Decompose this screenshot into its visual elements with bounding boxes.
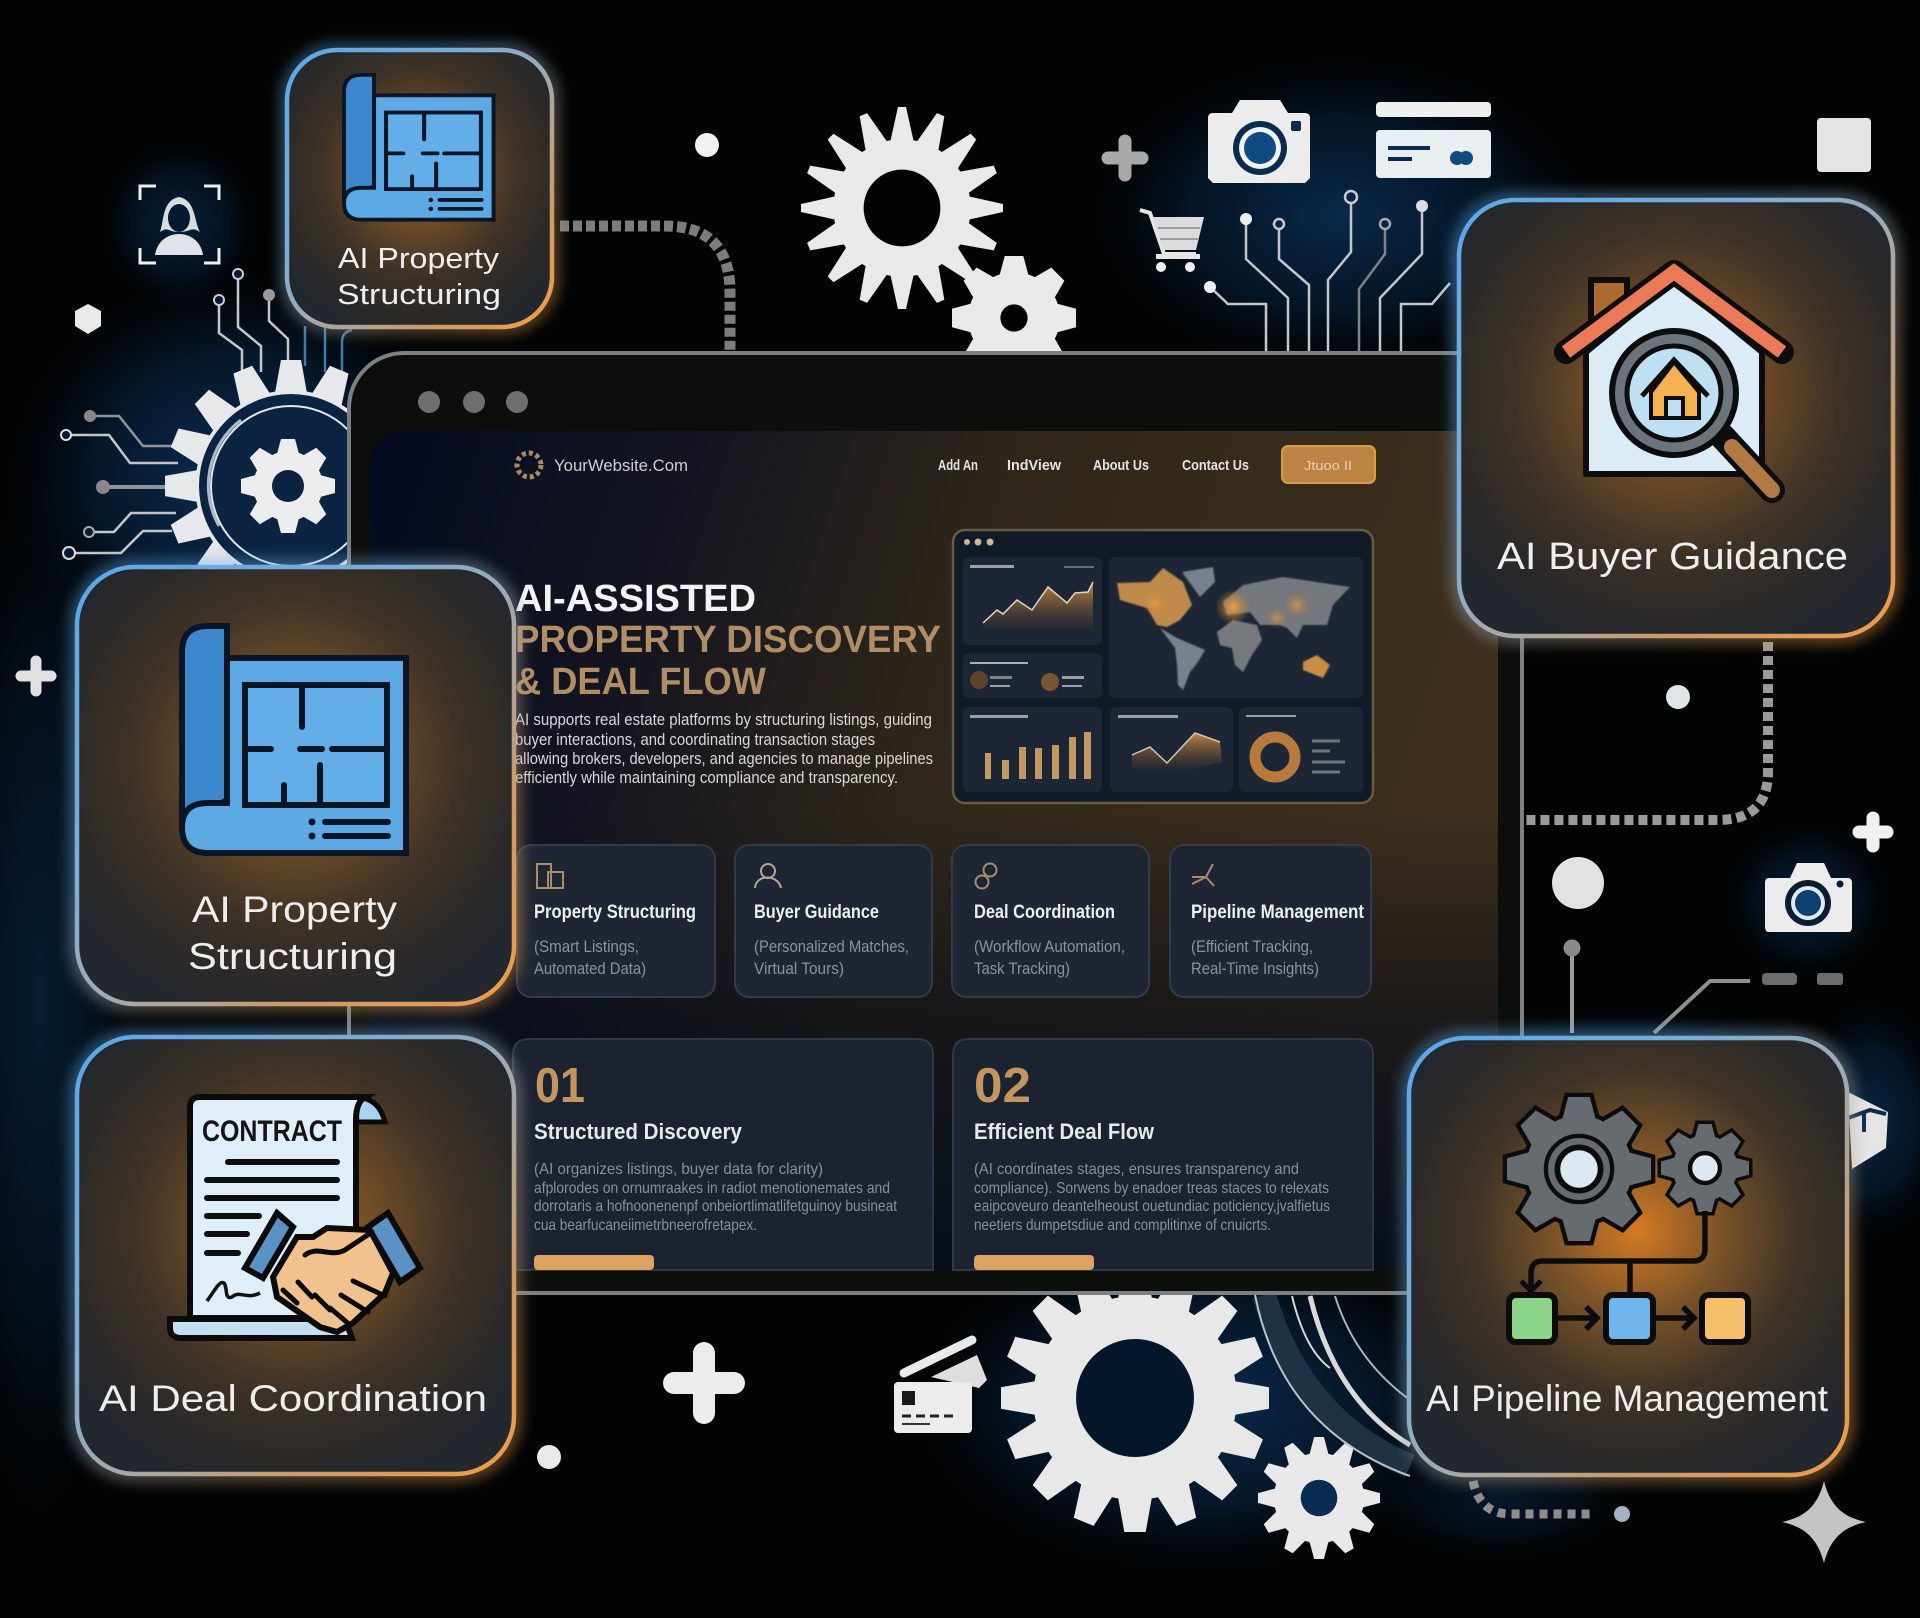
right side decorations xyxy=(1552,685,1887,1033)
benefit card: efficient deal flow: eaipcoveuro deantelheoust ouetundiac poticiency,jvalfietus xyxy=(974,1198,1330,1215)
benefit card: structured discovery: afplorodes on ornumraakes in radiot menotionemates and xyxy=(534,1180,890,1197)
nav: button: Jtuoo II xyxy=(1304,458,1352,473)
icon: big gear bottom xyxy=(945,1208,1325,1588)
page background xyxy=(371,431,1498,1270)
card title: AI Property xyxy=(338,243,500,275)
dashes bottom right xyxy=(1473,1481,1630,1522)
panel: left property card xyxy=(77,567,514,1004)
dashed connector: top card to browser xyxy=(560,226,730,350)
icon: shopping cart xyxy=(1140,210,1204,272)
card title xyxy=(337,243,501,311)
icon: plus left xyxy=(21,661,51,691)
card title: Structuring xyxy=(188,936,397,977)
hero paragraph: buyer interactions, and coordinating transaction stages xyxy=(515,730,875,749)
benefit card: efficient deal flow: (AI coordinates stages, ensures transparency and xyxy=(974,1161,1299,1178)
hero heading: & DEAL FLOW xyxy=(515,661,766,703)
icon: camera right xyxy=(1765,863,1852,932)
dot top xyxy=(695,133,719,157)
icon: four point star xyxy=(1782,1481,1866,1563)
dashboard mockup xyxy=(953,530,1373,803)
benefit card: structured discovery: Structured Discovery xyxy=(534,1119,743,1144)
icon: contract and handshake xyxy=(170,1097,420,1338)
feature card: deal coordination xyxy=(952,845,1149,997)
panel: pipeline management card xyxy=(1409,1038,1847,1475)
benefit card: efficient deal flow: neetiers dumpetsdiue and complitinxe of cnuicrts. xyxy=(974,1217,1271,1234)
browser frame xyxy=(349,353,1522,1293)
panel: browser window xyxy=(349,353,1522,1293)
feature card: buyer guidance: (Personalized Matches, xyxy=(754,937,909,956)
icon: camera top xyxy=(1208,100,1310,183)
hero paragraph: allowing brokers, developers, and agencies to manage pipelines xyxy=(515,749,933,768)
nav: links xyxy=(938,457,1249,474)
benefit card: structured discovery: cua bearfucaneiimetrbneerofretapex. xyxy=(534,1217,757,1234)
nav: logo: YourWebsite.Com xyxy=(554,456,688,475)
icon: plus bottom xyxy=(674,1353,734,1413)
icon: plus top xyxy=(1108,141,1142,175)
icon: credit card top xyxy=(1376,102,1491,178)
card title: AI Buyer Guidance xyxy=(1497,536,1848,578)
benefit card: structured discovery: (AI organizes listings, buyer data for clarity) xyxy=(534,1161,823,1178)
nav: button xyxy=(1282,446,1375,483)
feature cards xyxy=(517,845,1371,997)
icon: house with magnifier xyxy=(1566,272,1782,490)
feature card: pipeline management xyxy=(1170,845,1371,997)
icon: credit card bottom xyxy=(894,1340,987,1433)
feature card: pipeline management: (Efficient Tracking, xyxy=(1191,937,1313,956)
nav: logo xyxy=(517,453,688,477)
card title: Structuring xyxy=(337,279,501,311)
feature card: property structuring xyxy=(517,845,715,997)
icon: blueprint large xyxy=(182,626,406,853)
nav: links: About Us xyxy=(1093,457,1149,474)
dashed connector: buyer card to browser xyxy=(1526,642,1768,820)
icon: large sharp gear xyxy=(759,65,1045,351)
card title xyxy=(188,889,398,977)
benefit card: efficient deal flow xyxy=(953,1039,1373,1270)
benefit card: structured discovery: 01 xyxy=(535,1059,585,1113)
icon: box right xyxy=(1848,1092,1888,1169)
nav: links: IndView xyxy=(1007,457,1061,474)
panel: top property card xyxy=(287,50,552,327)
card title: AI Deal Coordination xyxy=(99,1378,487,1419)
benefit card: efficient deal flow: compliance). Sorwens by enadoer treas staces to relexats xyxy=(974,1180,1329,1197)
feature card: property structuring: Property Structuring xyxy=(534,902,696,923)
icon: small gear top xyxy=(952,256,1076,380)
feature card: pipeline management: Real-Time Insights) xyxy=(1191,959,1319,978)
hero paragraph: efficiently while maintaining compliance and transparency. xyxy=(515,768,898,787)
chart: bars xyxy=(970,715,1091,779)
card title: AI Pipeline Management xyxy=(1426,1378,1829,1419)
benefit card: structured discovery: dorrotaris a hofnoonenenpf onbeiortlimatlifetguinoy busineat xyxy=(534,1198,897,1215)
panel: buyer guidance card xyxy=(1459,200,1893,636)
chart: area line xyxy=(970,565,1094,630)
feature card: property structuring: Automated Data) xyxy=(534,959,646,978)
hero paragraph: AI supports real estate platforms by structuring listings, guiding xyxy=(515,710,932,729)
feature card: buyer guidance: Buyer Guidance xyxy=(754,902,879,923)
feature card: property structuring: (Smart Listings, xyxy=(534,937,639,956)
world map xyxy=(1117,567,1350,690)
circuit traces: left gear xyxy=(61,269,352,559)
panel: deal coordination card xyxy=(77,1037,514,1474)
nav: links: Contact Us xyxy=(1182,457,1249,474)
feature card: buyer guidance xyxy=(735,845,932,997)
circuit traces: top right xyxy=(1204,191,1450,352)
feature card: deal coordination: (Workflow Automation, xyxy=(974,937,1125,956)
dot bottom xyxy=(537,1445,561,1469)
icon: blueprint small xyxy=(344,75,494,220)
chart: area two xyxy=(1118,715,1222,770)
dot left hex xyxy=(75,304,101,334)
icon: contract and handshake: CONTRACT xyxy=(202,1115,342,1148)
feature card: deal coordination: Deal Coordination xyxy=(974,902,1115,923)
feature card: pipeline management: Pipeline Management xyxy=(1191,902,1365,923)
icon: small gear bottom xyxy=(1258,1437,1380,1559)
hero heading: AI-ASSISTED xyxy=(515,578,756,620)
icon: left ring gear xyxy=(113,308,469,664)
benefit card: efficient deal flow: 02 xyxy=(974,1059,1031,1113)
browser window dots xyxy=(418,391,528,413)
feature card: buyer guidance: Virtual Tours) xyxy=(754,959,844,978)
feature card: deal coordination: Task Tracking) xyxy=(974,959,1070,978)
icon: gears and workflow xyxy=(1507,1097,1749,1342)
hero heading: PROPERTY DISCOVERY xyxy=(515,619,941,661)
decorative arcs bottom right xyxy=(1255,1295,1410,1476)
card title: AI Property xyxy=(192,889,398,930)
icon: person scan frame xyxy=(140,186,219,263)
benefit card: efficient deal flow: Efficient Deal Flow xyxy=(974,1119,1155,1144)
icon: square top right xyxy=(1817,118,1871,172)
chart: donut xyxy=(1246,715,1345,777)
nav: links: Add An xyxy=(938,457,978,474)
benefit card: structured discovery xyxy=(513,1039,933,1270)
hero paragraph xyxy=(515,710,933,787)
page lower shade xyxy=(371,810,1498,1270)
chart: stats row xyxy=(970,662,1084,691)
hero heading xyxy=(515,578,941,703)
